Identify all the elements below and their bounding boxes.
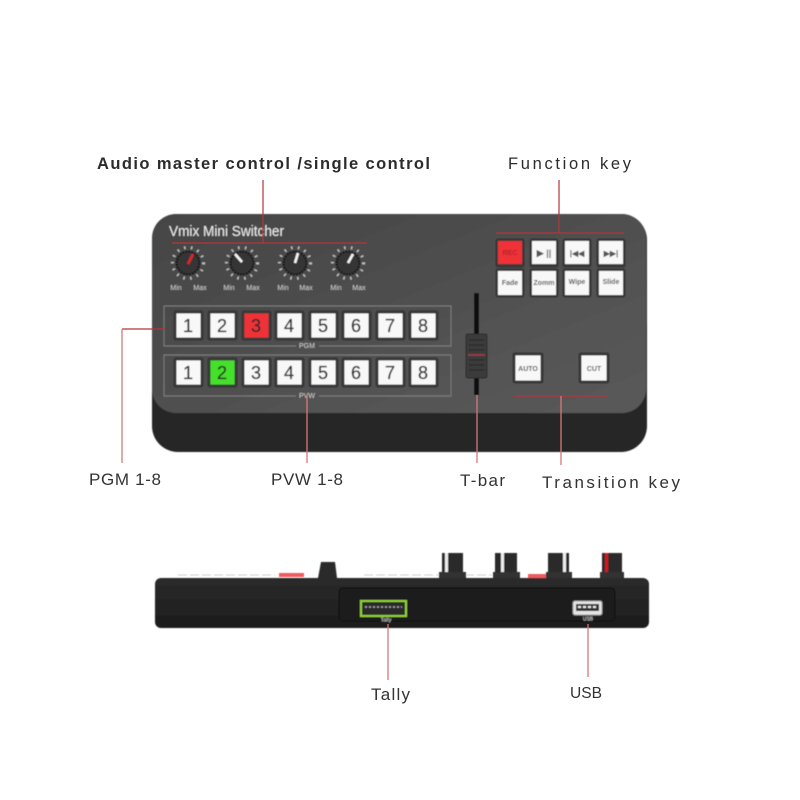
heading: audio control label: Audio master control /single control xyxy=(97,155,430,173)
knob 2: Max xyxy=(246,285,260,292)
PGM button row: PGM xyxy=(299,343,315,350)
knob group xyxy=(170,248,366,292)
PVW button row: 3 xyxy=(251,363,261,383)
function keys: Wipe xyxy=(569,279,585,286)
PVW button row: 8 xyxy=(418,363,428,383)
knob 2 xyxy=(223,248,260,292)
PGM button row: 4 xyxy=(284,316,294,336)
knob 3: Max xyxy=(299,285,313,292)
USB port xyxy=(573,601,602,622)
PGM button row: 7 xyxy=(385,316,395,336)
label: Tally: Tally xyxy=(371,685,410,704)
label: USB: USB xyxy=(570,685,602,702)
knob 4 xyxy=(330,248,366,292)
PGM button row: 5 xyxy=(318,316,328,336)
knob 1 xyxy=(170,248,207,292)
PVW button row xyxy=(164,355,451,400)
function keys: Slide xyxy=(603,279,619,286)
PGM button row xyxy=(164,306,451,350)
label: PGM 1-8: PGM 1-8 xyxy=(89,470,161,489)
function keys xyxy=(496,239,625,297)
knob 1: Min xyxy=(170,285,182,292)
knob 3: Min xyxy=(277,285,289,292)
PGM button row: 1 xyxy=(183,316,193,336)
PGM button row: 3 xyxy=(251,316,261,336)
function keys: Zomm xyxy=(534,280,554,287)
knob 2: Min xyxy=(223,285,235,292)
function keys: ▶ || xyxy=(536,248,551,258)
callout lines: top view xyxy=(122,180,624,465)
rear body xyxy=(155,578,649,628)
heading: function key label: Function key xyxy=(508,155,632,173)
panel: switcher top view xyxy=(152,214,647,452)
transition keys: CUT xyxy=(587,366,602,373)
knob 4: Max xyxy=(352,285,366,292)
PGM button row: 8 xyxy=(418,316,428,336)
function keys: Fade xyxy=(502,280,518,287)
knob 3 xyxy=(277,248,313,292)
PGM button row: 6 xyxy=(351,316,361,336)
PVW button row: 6 xyxy=(351,363,361,383)
PVW button row: 1 xyxy=(183,363,193,383)
PVW button row: 2 xyxy=(217,363,227,383)
tally connector: Tally xyxy=(380,618,392,624)
label: Transition key: Transition key xyxy=(542,473,680,492)
PVW button row: 7 xyxy=(385,363,395,383)
PVW button row: 4 xyxy=(284,363,294,383)
PVW button row: 5 xyxy=(318,363,328,383)
function keys: ▶▶| xyxy=(603,249,618,258)
device face xyxy=(152,214,646,413)
PVW button row: PVW xyxy=(299,393,315,400)
transition keys xyxy=(513,353,609,383)
function keys: |◀◀ xyxy=(570,249,585,258)
panel: switcher rear view xyxy=(155,553,649,628)
port plate xyxy=(339,588,615,621)
tally connector xyxy=(361,601,406,624)
USB port: USB xyxy=(583,616,594,622)
knob 4: Min xyxy=(330,285,342,292)
top-edge controls xyxy=(178,553,624,578)
label: T-bar: T-bar xyxy=(460,471,505,490)
label: PVW 1-8: PVW 1-8 xyxy=(271,470,343,489)
knob 1: Max xyxy=(193,285,207,292)
device body xyxy=(152,214,647,452)
transition keys: AUTO xyxy=(518,366,538,373)
T-bar fader xyxy=(466,293,487,395)
device title: Vmix Mini Switcher xyxy=(169,224,284,240)
PGM button row: 2 xyxy=(217,316,227,336)
callout lines: rear view xyxy=(388,624,588,680)
function keys: REC xyxy=(503,250,517,257)
